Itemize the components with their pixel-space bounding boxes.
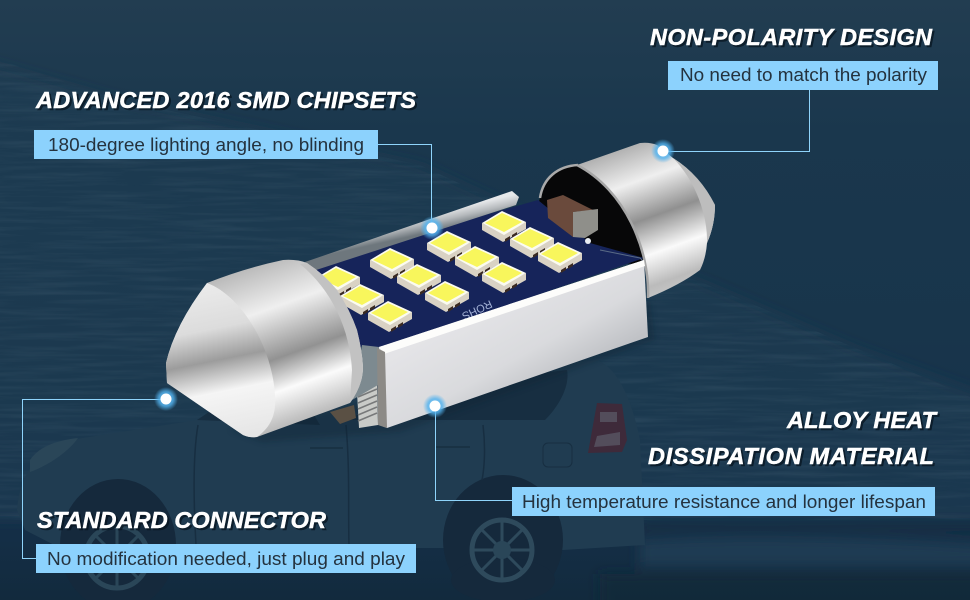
circuit board [310,200,644,352]
right metal cap [577,143,715,298]
heading: alloy heat: ALLOY HEAT [786,407,938,433]
alloy heat sink [330,260,648,428]
label: temperature [512,487,935,516]
heading: alloy heat: DISSIPATION MATERIAL [648,443,934,469]
connector: tip to plug label [22,400,165,558]
hotspot: tip [154,387,178,411]
LED chips [316,211,582,332]
label: polarity: No need to match the polarity [680,65,927,85]
hotspot: right cap [651,139,675,163]
bulb shadow [230,300,655,442]
connector: polarity to cap [665,90,810,152]
heading: non-polarity: NON-POLARITY DESIGN [652,26,935,52]
capacitor [547,195,598,244]
heading: non-polarity: NON-POLARITY DESIGN [650,24,933,50]
hotspot: chipsets [420,216,444,240]
heading: standard connector: STANDARD CONNECTOR [37,507,326,533]
heading: standard connector: STANDARD CONNECTOR [39,509,328,535]
board print: ROHS [460,297,494,322]
heading: alloy heat: ALLOY HEAT [788,409,940,435]
connector: lighting angle to chipset [378,144,432,226]
right cap rear opening [538,166,650,265]
label: polarity [668,61,938,90]
label: temperature: High temperature resistance and longer lifespan [522,492,926,512]
left metal cap [166,260,363,437]
heading: advanced chipsets: ADVANCED 2016 SMD CHIPSETS [35,87,416,113]
background car silhouette [17,360,645,600]
connector: heat sink to temperature label [436,408,512,500]
label: plug and play: No modification needed, just plug and play [47,549,405,569]
label: lighting angle [34,130,378,159]
connector pins and fins [357,382,378,428]
hotspot: heat sink [423,394,447,418]
bulb: LED festoon [166,143,715,442]
heading: alloy heat: DISSIPATION MATERIAL [650,445,936,471]
heading: alloy heat [648,407,940,471]
label: plug and play [36,544,416,573]
heading: advanced chipsets: ADVANCED 2016 SMD CHIPSETS [37,89,418,115]
label: lighting angle: 180-degree lighting angle, no blinding [48,135,364,155]
top metal rail [305,191,519,272]
